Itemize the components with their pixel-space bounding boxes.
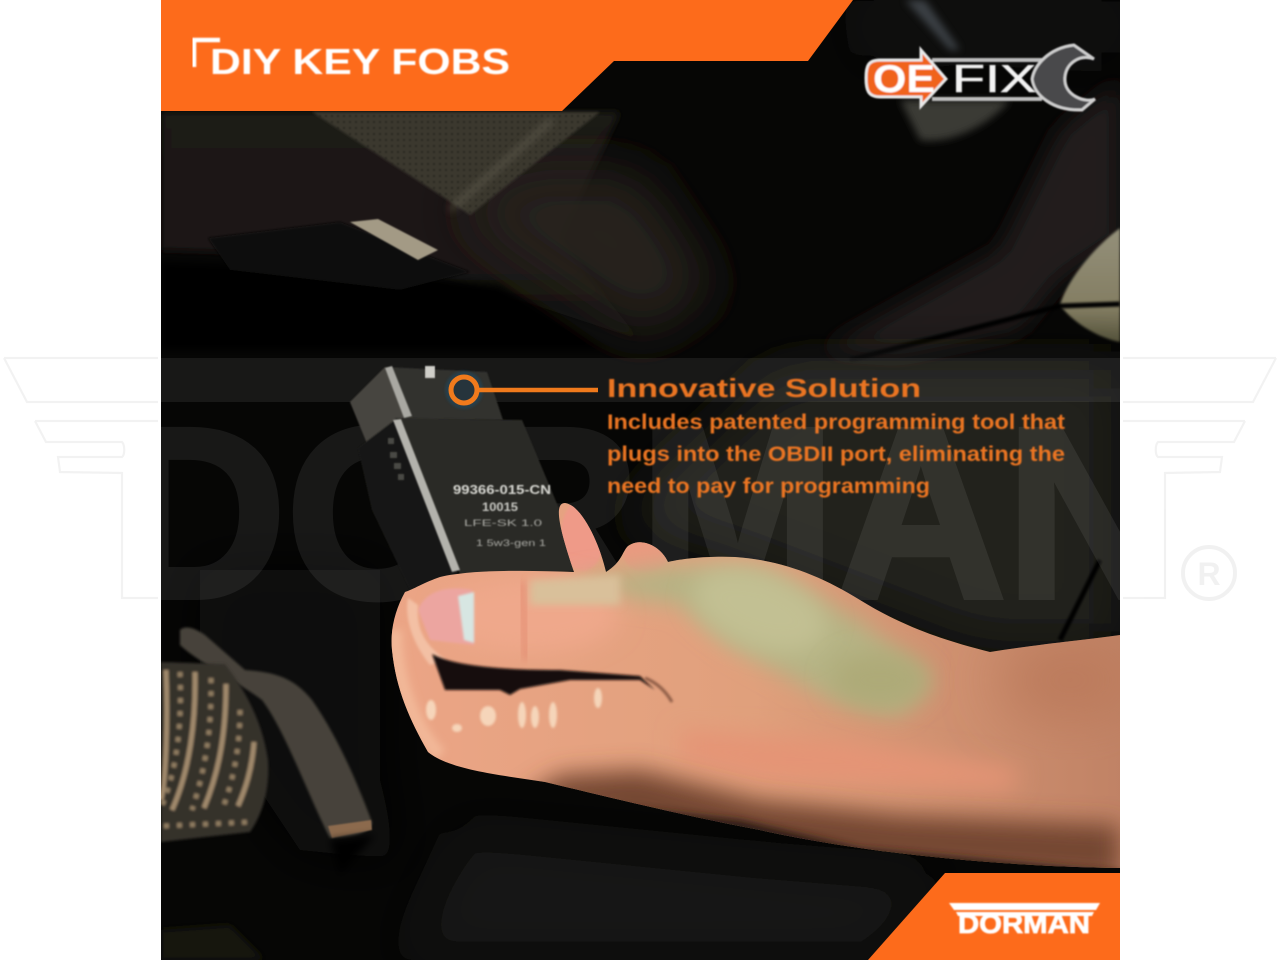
logo: Dorman — [949, 903, 1100, 939]
callout text: Innovative Solution: Includes patented programming tool that — [607, 411, 1065, 434]
logo: Dorman: DORMAN — [958, 909, 1090, 939]
callout text: Innovative Solution: Innovative Solution — [607, 373, 921, 403]
watermark: Dorman logo: R — [1197, 556, 1221, 592]
programming tool — [350, 365, 574, 576]
programming tool: LFE-SK 1.0 — [464, 518, 542, 528]
icon: corner bracket — [194, 40, 220, 67]
OE arrow badge — [866, 50, 946, 106]
programming tool: 1 5w3-gen 1 — [476, 538, 546, 548]
photo: car footwell background — [160, 0, 1120, 960]
bottom right orange corner — [868, 873, 1120, 960]
dashboard mesh — [312, 112, 720, 340]
shadow along underside — [520, 770, 1120, 880]
pedal arm — [180, 628, 375, 875]
callout text: Innovative Solution: need to pay for programming — [607, 475, 930, 498]
brake pedal — [160, 662, 268, 842]
thumb — [476, 570, 614, 642]
side door light — [1060, 228, 1120, 342]
callout marker and leader line — [445, 371, 598, 409]
watermark: Dorman logo: DORMAN — [116, 378, 1176, 649]
glow under logo — [900, 100, 1010, 141]
callout text: Innovative Solution — [607, 373, 1065, 498]
interior light strip — [350, 219, 438, 260]
green cast on hand — [575, 565, 930, 715]
icon: wrench — [1032, 45, 1095, 110]
watermark: Dorman logo — [3, 357, 1276, 602]
programming tool: 99366-015-CN — [453, 482, 551, 497]
photo: hand holding device — [350, 366, 1140, 880]
fingertips behind device — [560, 504, 602, 568]
finger gap — [432, 654, 655, 695]
logo: OE Fix: FIX — [952, 58, 1036, 101]
index finger highlights — [426, 688, 602, 732]
programming tool: 10015 — [482, 500, 518, 514]
soft light band on dash — [820, 80, 1120, 355]
top orange banner — [161, 0, 853, 111]
lower backdrop glow — [620, 370, 1120, 650]
title: DIY KEY FOBS — [210, 41, 510, 82]
logo: OE Fix: OE — [873, 58, 935, 101]
thumb nail — [418, 588, 474, 645]
warm band — [680, 730, 1020, 790]
callout text: Innovative Solution: plugs into the OBDII port, eliminating the — [607, 443, 1065, 466]
logo: OE Fix — [866, 45, 1095, 110]
